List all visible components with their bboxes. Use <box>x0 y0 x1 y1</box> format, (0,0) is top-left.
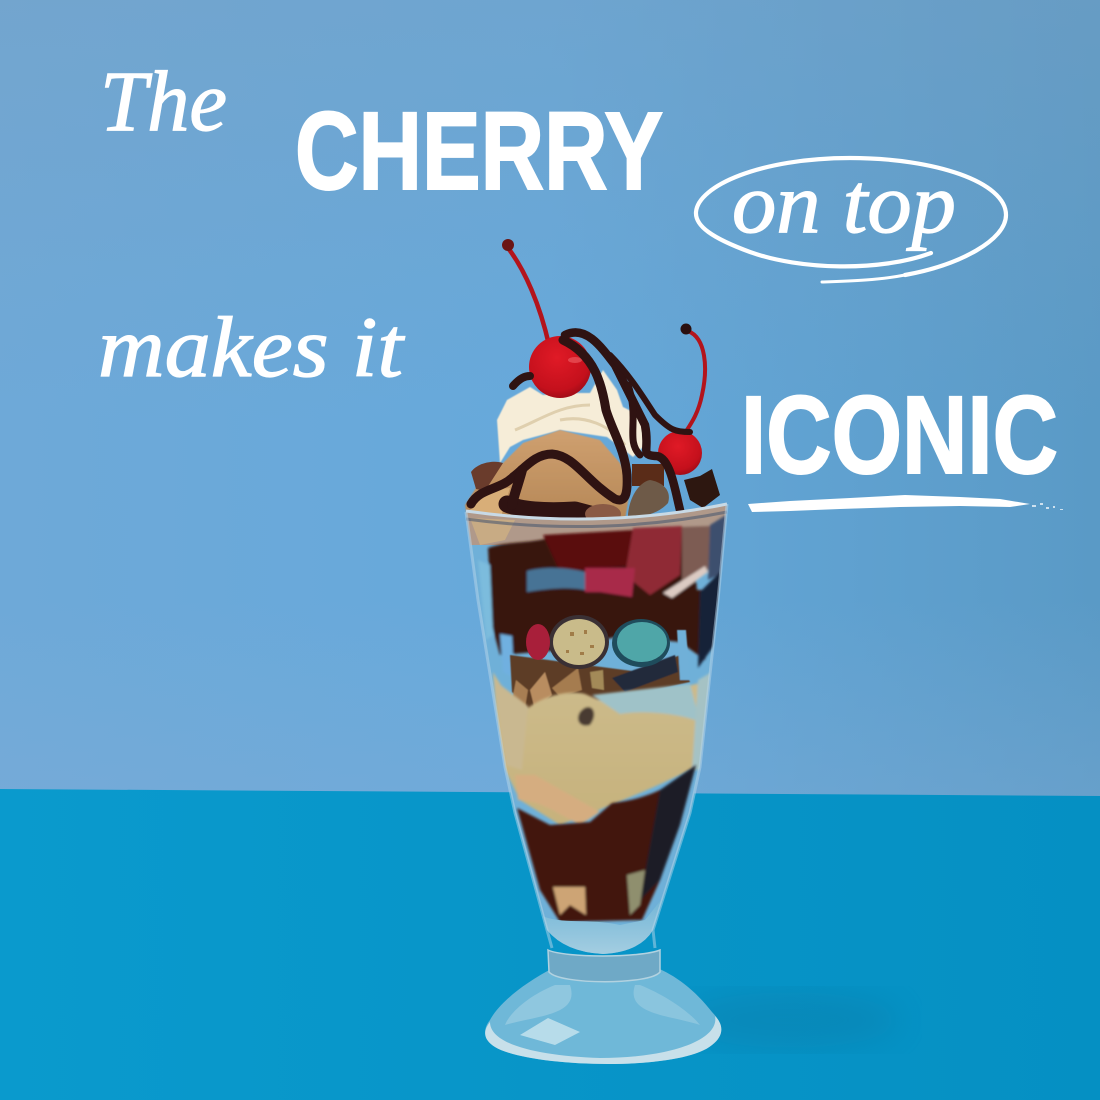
title word: CHERRY: CHERRY <box>295 90 663 213</box>
circled phrase: on top <box>696 155 1006 282</box>
ice cream scoop <box>465 430 630 522</box>
chocolate crispy ball right <box>612 619 670 667</box>
glass foot <box>485 950 721 1064</box>
title word: The: The <box>100 53 227 149</box>
biscuit piece <box>628 480 669 517</box>
empty glass base <box>543 898 664 954</box>
title words: makes it: makes it <box>98 299 405 395</box>
glass collar <box>548 950 660 982</box>
sauce layers <box>478 515 726 678</box>
hand-drawn oval <box>696 158 1006 282</box>
back cherry <box>658 431 702 475</box>
background wall <box>0 0 1100 800</box>
whipped cream <box>497 370 647 463</box>
glass rim <box>466 504 727 948</box>
top tan layer <box>460 505 740 545</box>
lower sauce layer <box>517 765 696 922</box>
blue table surface <box>0 789 1100 1100</box>
brush underline <box>748 495 1063 512</box>
front cherry <box>529 336 591 398</box>
chocolate wafer <box>632 464 664 486</box>
on top text: on top <box>732 155 956 251</box>
red cherry piece <box>526 624 550 660</box>
left chocolate <box>471 462 503 491</box>
biscuit bits <box>510 630 690 712</box>
glass shadow on table <box>680 992 900 1048</box>
chocolate ball <box>585 504 621 524</box>
chocolate crispy ball left <box>549 615 609 669</box>
sundae glass <box>460 239 740 1064</box>
bowl contents <box>460 500 740 960</box>
tan left patch <box>470 518 515 545</box>
dark brownie <box>684 469 720 508</box>
ice cream layer <box>493 672 712 825</box>
chocolate syrup <box>471 332 690 514</box>
cherry stems <box>502 239 705 436</box>
